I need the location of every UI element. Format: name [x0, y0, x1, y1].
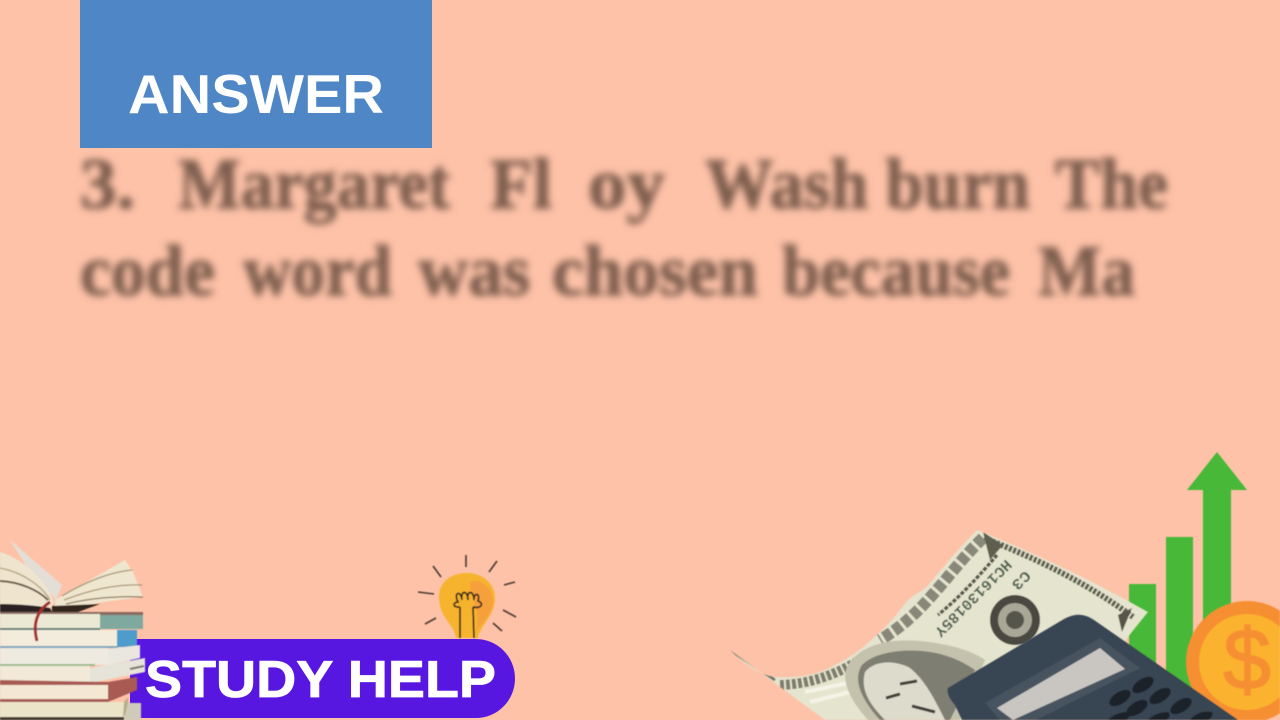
treasury seal [990, 595, 1040, 645]
icon: coin [1186, 601, 1280, 720]
icon: dollar bill [730, 530, 1148, 720]
answer heading [80, 0, 432, 148]
study help banner [130, 639, 515, 718]
answer heading: ANSWER [128, 63, 384, 125]
blurred answer text: was [418, 231, 530, 311]
blurred answer text: Margaret [178, 144, 450, 224]
series code: C3 [1007, 566, 1033, 593]
blurred answer text: 3. [80, 144, 135, 224]
icon: light bulb [418, 555, 516, 638]
portrait [845, 640, 985, 720]
blurred answer text: word [243, 231, 392, 311]
book 1 [0, 612, 143, 630]
blurred answer text: The [1055, 144, 1168, 224]
book 5 [0, 677, 137, 702]
serial number: HC16130185Y [930, 555, 1014, 640]
blurred answer text: Ma [1038, 231, 1135, 311]
icon: calculator [948, 615, 1238, 720]
bookmark ribbon [35, 602, 50, 641]
icon: stack of books [0, 540, 145, 720]
book 6 [0, 697, 141, 720]
engraved border [984, 538, 1133, 617]
chart: green growth bars and arrow [1129, 452, 1247, 707]
blurred answer text: because [782, 231, 1010, 311]
blurred answer text: Wash burn [705, 144, 1030, 224]
open book [0, 540, 143, 612]
study help banner: STUDY HELP [145, 651, 496, 709]
blurred answer text: Fl [490, 144, 552, 224]
blurred answer text [80, 144, 1168, 311]
book 4 [0, 658, 145, 683]
icon: coin: $ [1223, 612, 1271, 708]
blurred answer text: chosen [552, 231, 758, 311]
book 3 [0, 645, 140, 666]
blurred answer text: code [80, 231, 215, 311]
book 2 [0, 630, 137, 648]
blurred answer text: oy [588, 144, 665, 224]
calculator keys [1107, 674, 1212, 720]
